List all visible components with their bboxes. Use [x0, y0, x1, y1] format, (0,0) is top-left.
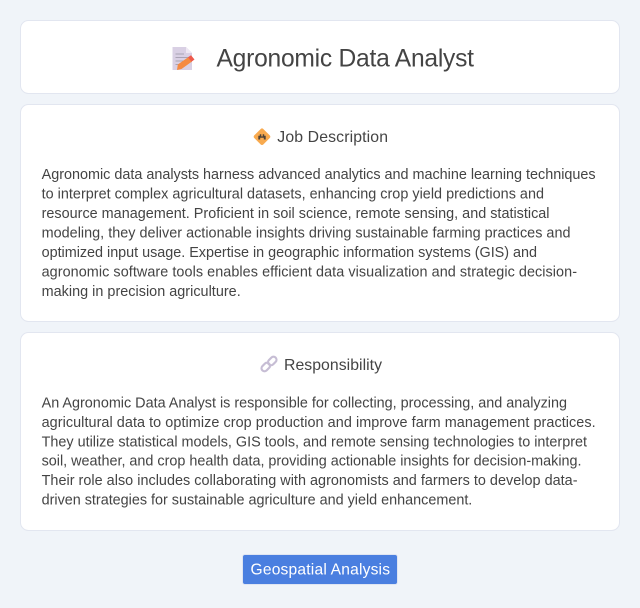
text block: responsibility: driven strategies for sustainable agriculture and yield enhancement.	[42, 492, 472, 508]
text block: responsibility: An Agronomic Data Analyst is responsible for collecting, processing, and analyzing	[42, 395, 567, 411]
text block: job description: Agronomic data analysts harness advanced analytics and machine learning techniques	[42, 167, 596, 183]
text block: responsibility	[42, 395, 596, 508]
text block: responsibility: Their role also includes collaborating with agronomists and farmers to develop data-	[42, 473, 578, 489]
panel: title card	[20, 20, 620, 94]
button: geospatial analysis	[242, 554, 398, 584]
heading: job description: Job Description	[277, 129, 388, 146]
panel: job description	[20, 104, 620, 322]
icon: document with pencil	[172, 47, 194, 70]
text block: responsibility: They utilize statistical models, GIS tools, and remote sensing technologies to interpret	[42, 434, 587, 450]
text block: job description	[42, 167, 596, 300]
text block: job description: resource management. Proficient in soil science, remote sensing, and statistical	[42, 206, 549, 222]
text block: job description: agronomic software tools enables efficient data visualization and strategic decision-	[42, 264, 577, 280]
title: Agronomic Data Analyst	[216, 46, 474, 73]
button: geospatial analysis: Geospatial Analysis	[250, 562, 390, 578]
text block: responsibility: agricultural data to optimize crop production and improve farm management practices.	[42, 415, 596, 431]
text block: job description: making in precision agriculture.	[42, 284, 241, 300]
text block: job description: to interpret complex agricultural datasets, enhancing crop yield predictions and	[42, 186, 544, 202]
icon: chain link	[260, 356, 278, 372]
icon: diamond sign	[253, 128, 271, 146]
text block: responsibility: soil, weather, and crop health data, providing actionable insights for decision-making.	[42, 454, 582, 470]
text block: job description: modeling, they deliver actionable insights driving sustainable farming practices and	[42, 226, 571, 242]
panel: responsibility	[20, 332, 620, 530]
heading: responsibility: Responsibility	[284, 357, 382, 374]
text block: job description: optimized input usage. Expertise in geographic information systems (GIS) and	[42, 245, 537, 261]
